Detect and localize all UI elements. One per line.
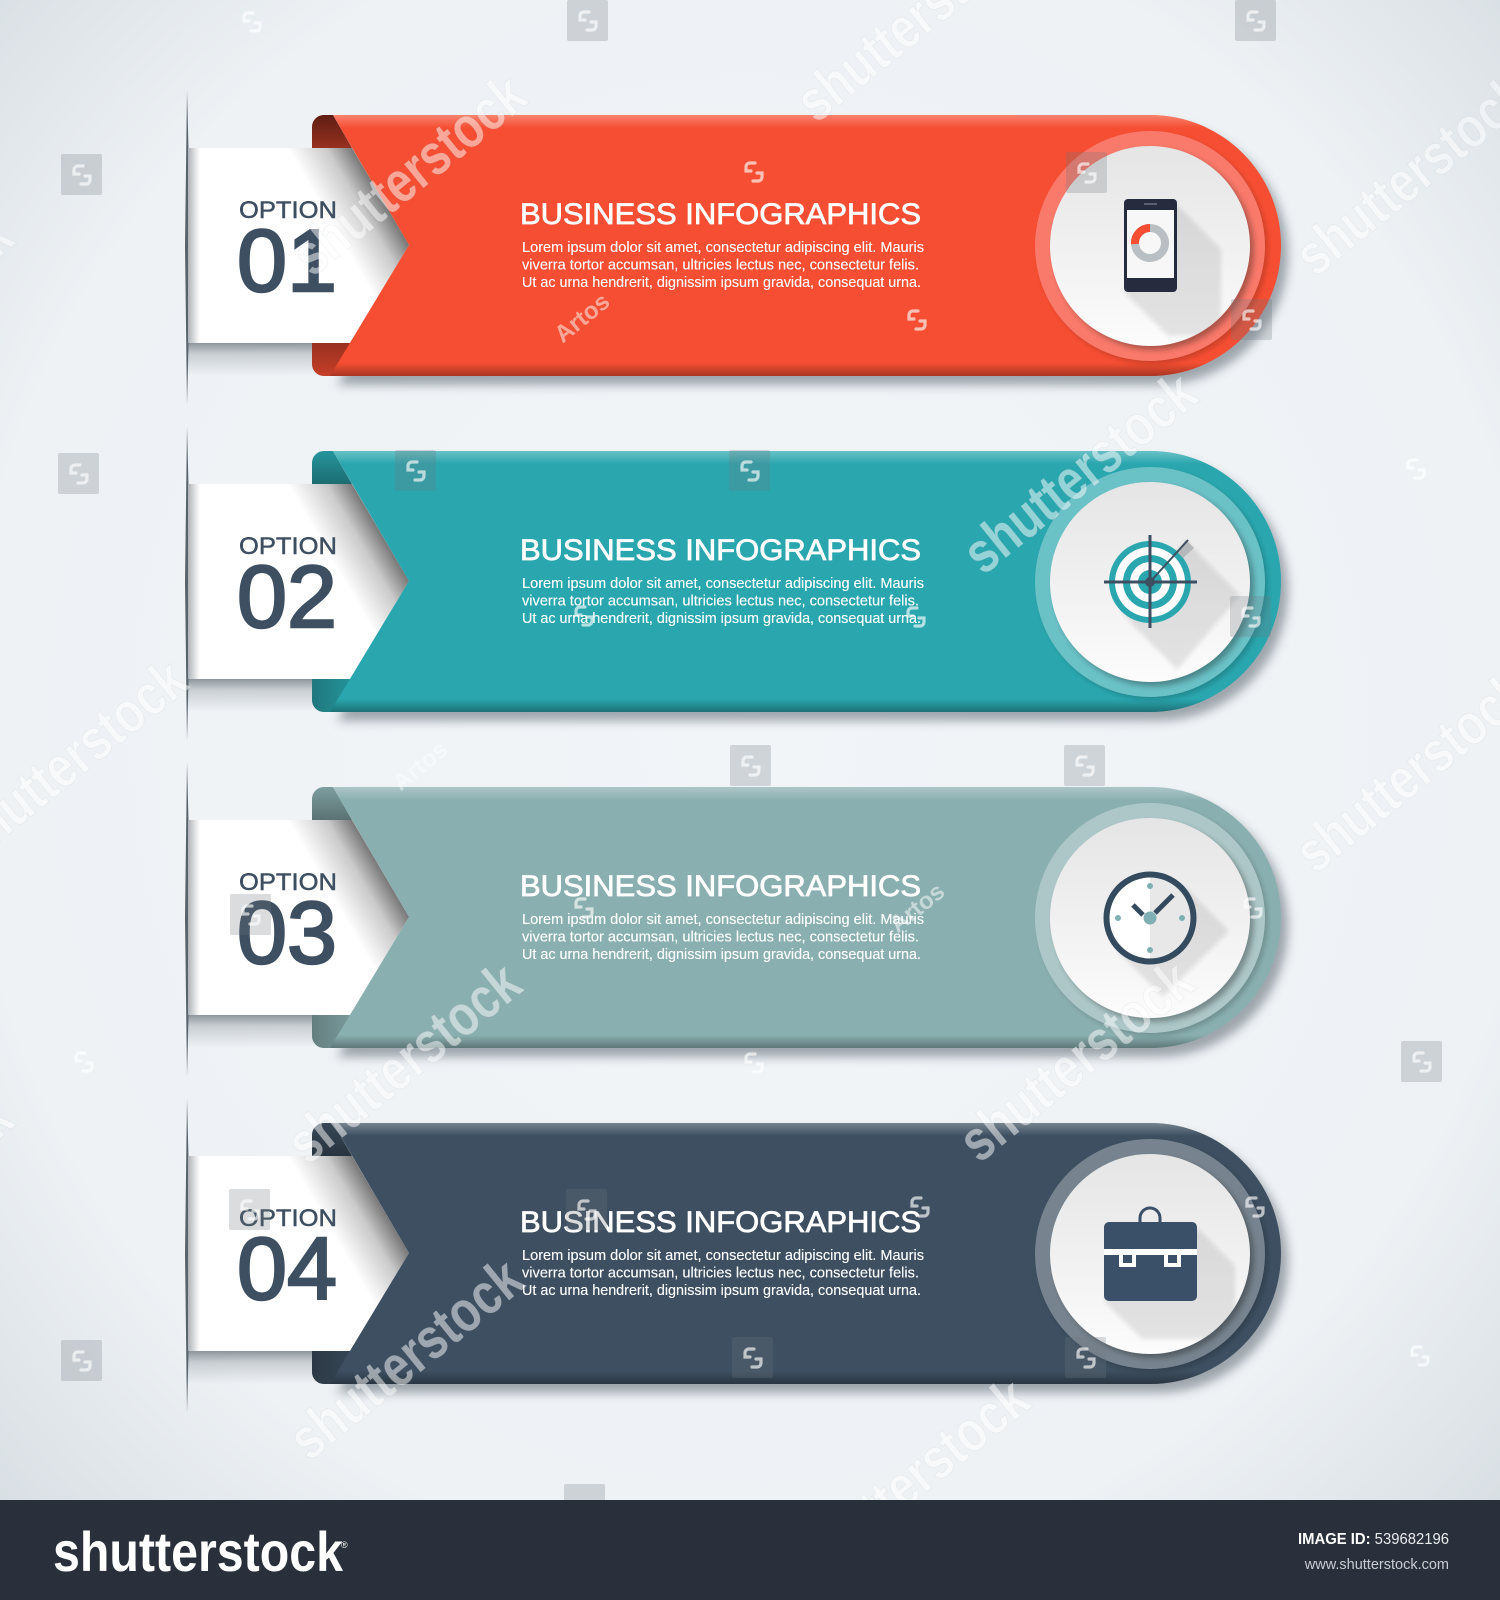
tab shadow <box>188 679 352 712</box>
body text: viverra tortor accumsan, ultricies lectus nec, consectetur felis. <box>522 594 919 610</box>
ring <box>1035 803 1265 1033</box>
tab shadow <box>188 343 352 376</box>
panel: option 03 <box>185 762 1288 1077</box>
option number: 01 <box>237 211 337 310</box>
body text: viverra tortor accumsan, ultricies lectus nec, consectetur felis. <box>522 930 919 946</box>
band <box>330 115 1281 376</box>
tab inner shadow <box>188 148 410 343</box>
white tab <box>188 148 409 343</box>
body text: Ut ac urna hendrerit, dignissim ipsum gravida, consequat urna. <box>522 1283 921 1299</box>
option label: OPTION <box>239 533 337 560</box>
watermarks: shutterstock <box>279 61 538 288</box>
band shadow <box>337 124 1288 385</box>
disc <box>1050 818 1250 1018</box>
footer bar <box>0 1500 1500 1600</box>
watermarks: shutterstock <box>274 949 533 1176</box>
heading: BUSINESS INFOGRAPHICS <box>520 534 921 567</box>
band fold top <box>312 115 352 148</box>
watermarks: shutterstock <box>950 359 1209 586</box>
fold top dark <box>312 787 352 820</box>
band <box>330 1123 1281 1384</box>
fold top dark <box>312 1123 352 1156</box>
option number: 03 <box>237 883 337 982</box>
band shadow <box>337 460 1288 721</box>
icon: briefcase <box>1104 1208 1235 1339</box>
ring shadow <box>1038 134 1268 364</box>
body text: Lorem ipsum dolor sit amet, consectetur adipiscing elit. Mauris <box>522 912 924 928</box>
body text <box>522 576 924 627</box>
white tab <box>188 484 409 679</box>
band shading <box>330 787 1281 1048</box>
image id: IMAGE ID: 539682196 <box>1298 1531 1449 1548</box>
tab inner shadow <box>188 484 410 679</box>
body text <box>522 1248 924 1299</box>
ring shadow <box>1038 806 1268 1036</box>
watermarks: Artos <box>387 736 453 796</box>
band fold bottom <box>312 1351 351 1384</box>
fold top dark <box>312 115 352 148</box>
icon: smartphone <box>1124 199 1221 336</box>
body text: viverra tortor accumsan, ultricies lectus nec, consectetur felis. <box>522 1266 919 1282</box>
fold bottom dark <box>312 1015 351 1048</box>
disc <box>1050 482 1250 682</box>
band fold bottom <box>312 679 351 712</box>
tab inner shadow <box>188 820 410 1015</box>
heading: BUSINESS INFOGRAPHICS <box>520 870 921 903</box>
band shading <box>330 1123 1281 1384</box>
fold bottom dark <box>312 343 351 376</box>
panel: option 02 <box>185 426 1288 741</box>
option number: 04 <box>237 1219 337 1318</box>
disc shadow <box>1054 1158 1254 1358</box>
watermarks: shutterstock <box>276 1245 535 1472</box>
fold line <box>185 762 191 1077</box>
option label: OPTION <box>239 1205 337 1232</box>
website: www.shutterstock.com <box>1304 1557 1449 1573</box>
fold bottom dark <box>312 679 351 712</box>
body text: Ut ac urna hendrerit, dignissim ipsum gravida, consequat urna. <box>522 947 921 963</box>
fold top dark <box>312 451 352 484</box>
band <box>330 787 1281 1048</box>
band fold top <box>312 1123 352 1156</box>
band <box>330 451 1281 712</box>
band shading <box>330 115 1281 376</box>
disc <box>1050 1154 1250 1354</box>
body text: Lorem ipsum dolor sit amet, consectetur adipiscing elit. Mauris <box>522 240 924 256</box>
option number: 02 <box>237 547 337 646</box>
body text: Lorem ipsum dolor sit amet, consectetur adipiscing elit. Mauris <box>522 1248 924 1264</box>
icon: clock <box>1106 874 1229 997</box>
body text: Lorem ipsum dolor sit amet, consectetur adipiscing elit. Mauris <box>522 576 924 592</box>
white tab <box>188 820 409 1015</box>
tab shadow <box>188 1351 352 1384</box>
panel: option 01 <box>185 90 1288 405</box>
ring shadow <box>1038 470 1268 700</box>
disc <box>1050 146 1250 346</box>
heading: BUSINESS INFOGRAPHICS <box>520 1206 921 1239</box>
watermarks: shutterstock <box>946 947 1205 1174</box>
footer logo: shutterstock <box>53 1520 344 1583</box>
disc shadow <box>1054 150 1254 350</box>
fold bottom dark <box>312 1351 351 1384</box>
ring <box>1035 1139 1265 1369</box>
disc shadow <box>1054 822 1254 1022</box>
watermarks: Artos <box>549 288 615 348</box>
option label: OPTION <box>239 197 337 224</box>
ring shadow <box>1038 1142 1268 1372</box>
disc shadow <box>1054 486 1254 686</box>
fold line <box>185 426 191 741</box>
tab inner shadow <box>188 1156 410 1351</box>
band fold top <box>312 451 352 484</box>
body text <box>522 240 924 291</box>
watermarks: Artos <box>884 878 950 938</box>
band shadow <box>337 796 1288 1057</box>
fold line <box>185 90 191 405</box>
heading: BUSINESS INFOGRAPHICS <box>520 198 921 231</box>
body text: viverra tortor accumsan, ultricies lectus nec, consectetur felis. <box>522 258 919 274</box>
watermarks: shutterstock <box>782 1365 1041 1592</box>
band fold bottom <box>312 1015 351 1048</box>
body text <box>522 912 924 963</box>
ring <box>1035 131 1265 361</box>
band shading <box>330 451 1281 712</box>
body text: Ut ac urna hendrerit, dignissim ipsum gravida, consequat urna. <box>522 611 921 627</box>
icon: target with arrow <box>1104 535 1240 670</box>
band fold bottom <box>312 343 351 376</box>
ring <box>1035 467 1265 697</box>
band fold top <box>312 787 352 820</box>
option label: OPTION <box>239 869 337 896</box>
band shadow <box>337 1132 1288 1393</box>
panel: option 04 <box>185 1098 1288 1413</box>
white tab <box>188 1156 409 1351</box>
fold line <box>185 1098 191 1413</box>
tab shadow <box>188 1015 352 1048</box>
body text: Ut ac urna hendrerit, dignissim ipsum gravida, consequat urna. <box>522 275 921 291</box>
registered mark: ® <box>341 1540 348 1550</box>
